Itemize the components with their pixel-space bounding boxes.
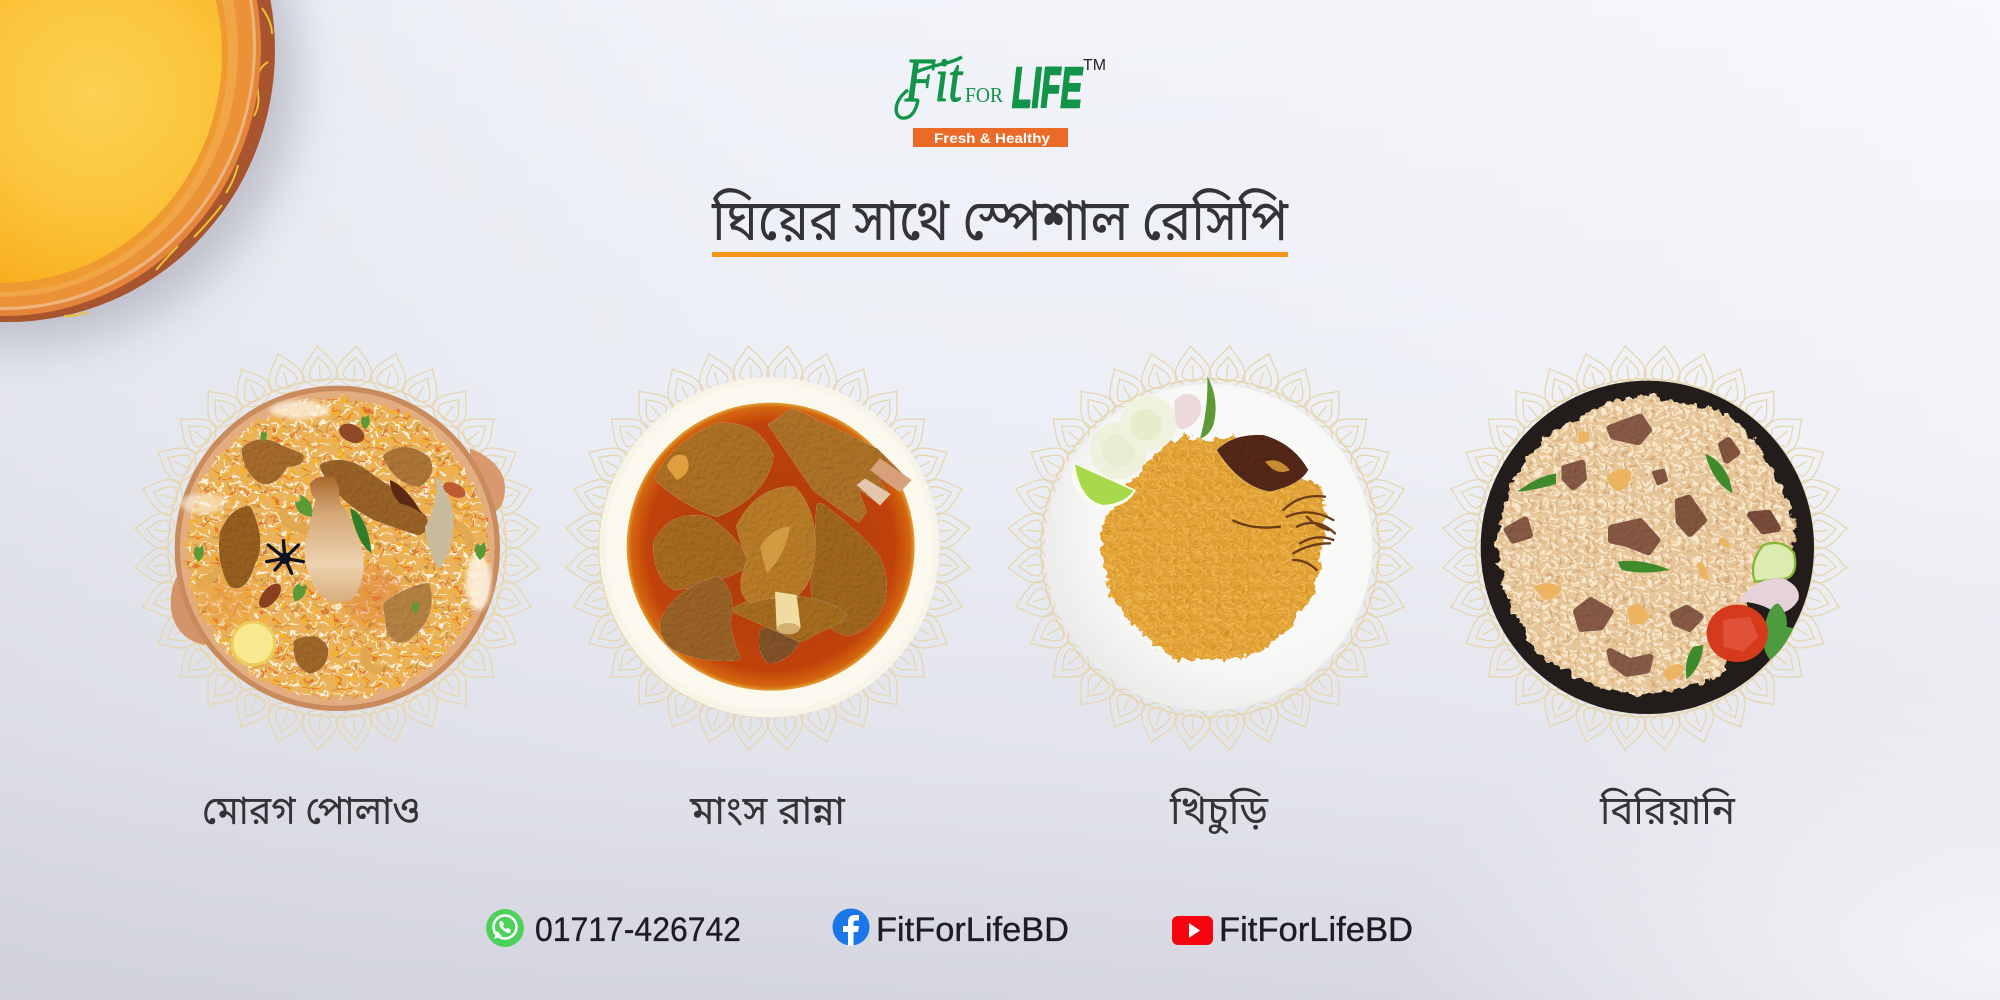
logo word for: FOR: [965, 83, 1003, 107]
panel: biryani: [1441, 344, 1849, 841]
mandala ornament: [133, 344, 541, 752]
mandala ornament: [564, 344, 972, 752]
label: খিচুড়ি: [1169, 787, 1269, 841]
logo script word: Fit: [904, 47, 963, 115]
logo word life: LIFE: [1012, 56, 1083, 120]
contact: facebook: [832, 908, 1069, 949]
icon: facebook: [832, 908, 870, 946]
title underline: [712, 252, 1288, 257]
facebook handle: FitForLifeBD: [876, 911, 1069, 949]
label: মোরগ পোলাও: [202, 788, 420, 841]
dish: black plate of beef rice: [1481, 381, 1814, 714]
dish: white plate of khichuri: [1046, 376, 1373, 710]
contact: youtube: [1172, 911, 1413, 949]
logo: [896, 47, 1106, 147]
dish: clay pot of rice: [171, 386, 505, 711]
contact: whatsapp: [486, 909, 741, 949]
mandala ornament: [1006, 344, 1414, 752]
tagline: Fresh & Healthy: [934, 131, 1051, 146]
logo swash: [896, 57, 962, 118]
phone number: 01717-426742: [535, 911, 741, 949]
ghee bowl: [0, 0, 298, 344]
panel: mangsho ranna: [564, 344, 972, 841]
panel: khichuri: [1006, 344, 1414, 841]
mandala ornament: [1441, 344, 1849, 752]
dish: white bowl of curry: [599, 377, 939, 717]
trademark: TM: [1083, 57, 1106, 74]
panel: morog polao: [133, 344, 541, 841]
tagline bar: [913, 128, 1068, 147]
youtube handle: FitForLifeBD: [1219, 911, 1413, 949]
label: মাংস রান্না: [689, 788, 846, 841]
title: ঘিয়ের সাথে স্পেশাল রেসিপি: [711, 187, 1289, 264]
icon: youtube: [1172, 916, 1213, 945]
label: বিরিয়ানি: [1599, 788, 1736, 841]
icon: whatsapp: [486, 909, 524, 947]
